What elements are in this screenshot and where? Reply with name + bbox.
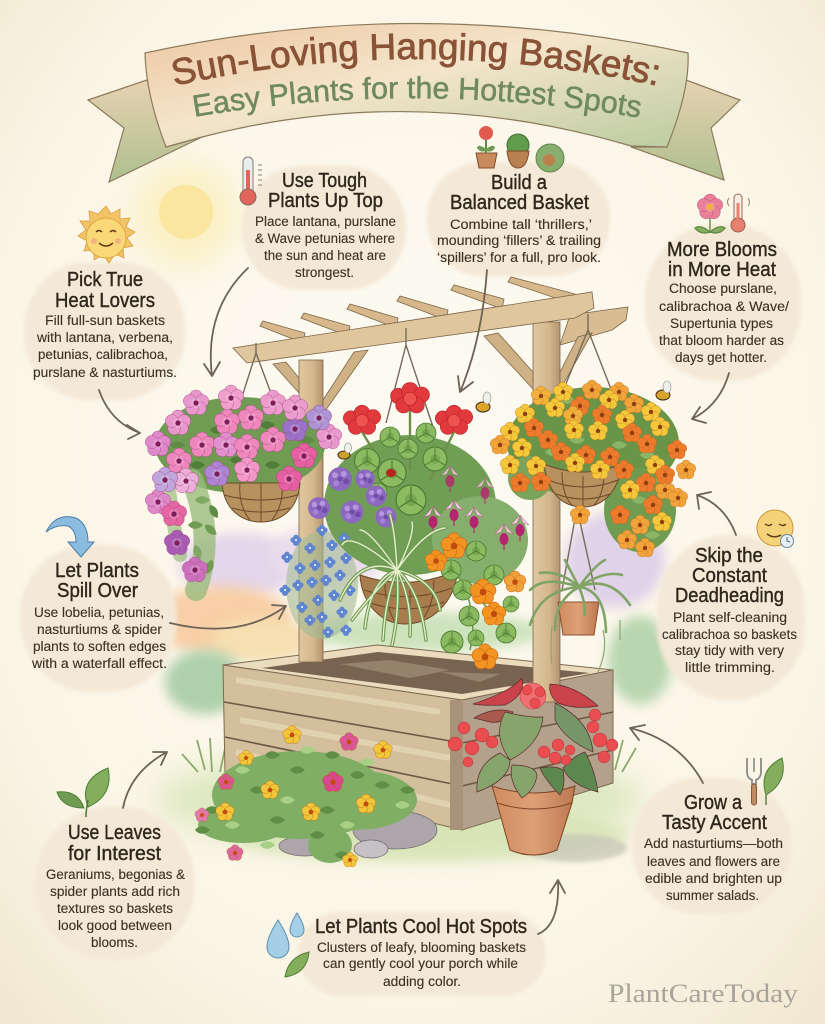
body text: calibrachoa so baskets [662,627,797,643]
spider runners [551,620,620,672]
body text: petunias, calibrachoa, [38,347,168,363]
body text: adding color. [383,974,461,990]
heading: Spill Over [57,579,138,602]
title line 2: Easy Plants for the Hottest Spots [193,76,641,118]
heading: Skip the [695,544,763,567]
heading [662,791,767,834]
right post [533,322,560,702]
arrow: more blooms [692,373,729,423]
body text: & Wave petunias where [255,231,395,247]
heading [450,171,589,214]
heading [667,238,777,281]
planter scene [182,645,636,830]
heading [55,559,139,602]
blue lobelia [279,525,356,638]
basket: calibrachoa [490,380,696,557]
heading: Tasty Accent [662,811,767,834]
heading [268,169,383,212]
icon: curved blue arrow [46,517,94,557]
heading: Let Plants Cool Hot Spots [315,915,527,938]
body text: blooms. [91,935,138,951]
icon: green leaves [57,768,109,817]
geranium leaves [354,423,447,515]
body text: that bloom harder as [659,333,784,349]
body text: the sun and heat are [264,248,386,264]
panel: more blooms in more heat [659,194,789,366]
heading [55,268,155,312]
heading: Build a [491,171,548,194]
red geraniums [343,382,473,434]
panel: let plants cool hot spots [267,913,527,990]
heading: Let Plants [55,559,139,582]
nasturtium trail [425,533,526,669]
panel: grow a tasty accent [644,758,783,904]
left post [299,360,323,662]
begonia in terracotta pot [448,678,627,862]
body text: Use lobelia, petunias, [34,605,164,621]
icon: relaxed face with clock [757,510,794,548]
body text: Fill full-sun baskets [45,313,165,329]
heading [68,821,161,865]
body text [437,217,601,266]
fuchsia [424,466,529,550]
foliage [155,397,325,590]
arrow: spill over [170,605,286,629]
wooden pergola [233,277,628,702]
bees [338,381,671,459]
arrow: build a basket [458,270,487,392]
heading: Deadheading [675,584,784,607]
icon: three small plants [476,126,564,172]
body text: Choose purslane, [669,281,777,297]
watermark: PlantCareToday [608,979,798,1008]
body text: Combine tall ‘thrillers,’ [450,217,592,233]
panel: skip the constant deadheading [662,510,797,676]
arrow: cool hot spots [538,880,565,934]
grass tufts [182,738,636,772]
arrow: use tough plants [204,268,248,376]
spider plant leaves [340,515,445,645]
spider leaves [530,560,630,632]
body text [659,281,789,366]
begonia leaves [473,678,598,798]
panel: build a balanced basket [437,126,601,266]
body text: nasturtiums & spider [37,622,162,638]
body text: summer salads. [666,888,759,904]
body text: plants to soften edges [33,639,166,655]
basket: petunias [145,385,342,590]
body text [31,605,167,672]
heading: Pick True [67,268,143,291]
purslane blossoms [195,726,392,867]
body text: with lantana, verbena, [36,330,173,346]
arrow: pick true heat lovers [99,390,140,439]
body text [33,313,177,381]
hanger wires [240,314,611,590]
begonia blooms [448,683,618,767]
body text: Supertunia types [670,316,773,332]
body text: can gently cool your porch while [323,956,518,972]
heading: More Blooms [667,238,777,261]
body text: days get hotter. [675,350,767,366]
purslane mound with rocks [195,726,437,867]
body text: with a waterfall effect. [31,656,167,672]
body text: purslane & nasturtiums. [33,365,177,381]
body text: look good between [58,918,172,934]
body text [644,836,783,904]
body text: Geraniums, begonias & [46,867,186,883]
terracotta pot [492,786,575,855]
body text: little trimming. [685,660,775,676]
icon: fork and leaf [747,758,783,805]
bubble backgrounds [20,162,805,996]
body text: spider plants add rich [50,884,180,900]
main beam [233,292,594,363]
body text [317,940,526,990]
body text: Plant self-cleaning [673,610,787,626]
icon: smiling sun [78,206,135,263]
arrows [99,268,736,934]
heading: Use Leaves [68,821,161,844]
heading: Balanced Basket [450,191,589,214]
panel: use leaves for interest [46,768,186,951]
heading: Constant [692,564,767,587]
arrow: use leaves [123,752,167,808]
heading: in More Heat [668,258,776,281]
body text: mounding ‘fillers’ & trailing [437,233,601,249]
heading: Grow a [684,791,743,814]
basket: mixed centre [279,382,529,669]
icon: flower and thermometer [695,194,750,233]
body text [255,214,396,281]
banner body [145,24,688,147]
heading [675,544,784,607]
lobelia mound [286,531,358,639]
braces [273,333,592,414]
main foliage [324,435,496,575]
heading: Use Tough [282,169,367,192]
body text [662,610,797,676]
foliage mound [507,387,679,499]
calibrachoa flowers [490,380,696,557]
ladybug [386,469,396,477]
hanging basket [222,483,300,522]
body text: Clusters of leafy, blooming baskets [317,940,526,956]
body text: calibrachoa & Wave/ [659,299,789,315]
body text: strongest. [295,265,354,281]
left ribbon tail [88,80,202,182]
rocks [279,811,437,858]
arrow: tasty accent [630,725,703,783]
heading: Plants Up Top [268,189,383,212]
panel: pick true heat lovers [33,206,177,381]
right ribbon tail [631,80,740,180]
body text: stay tidy with very [675,643,785,659]
title line 1: Sun-Loving Hanging Baskets: [172,32,659,86]
body text: leaves and flowers are [647,854,780,870]
body text: textures so baskets [57,901,173,917]
body text [46,867,186,951]
icon: thermometer [240,157,262,205]
icon: big pale sun [159,185,213,239]
body text: Place lantana, purslane [255,214,396,230]
purlins [260,277,575,343]
body text: edible and brighten up [645,871,782,887]
rear beam [560,307,628,345]
hanging basket [544,464,622,507]
icon: water drops and leaf [267,913,309,977]
hanging spider plant [530,560,630,672]
body text: Add nasturtiums—both [644,836,783,852]
geranium stems [362,410,454,480]
petunia flowers [145,385,342,582]
foliage [198,751,417,863]
purple verbena [308,467,396,527]
arrow: skip deadheading [697,492,736,535]
title banner [86,22,741,183]
panel: let plants spill over [31,517,167,672]
spider pot [558,602,599,635]
heading: for Interest [68,842,161,865]
panel: use tough plants up top [240,157,396,281]
raised wood planter [223,645,613,830]
body text: ‘spillers’ for a full, pro look. [437,250,601,266]
heading: Heat Lovers [55,289,155,312]
pot shadow [523,834,627,862]
centre basket [360,570,458,624]
